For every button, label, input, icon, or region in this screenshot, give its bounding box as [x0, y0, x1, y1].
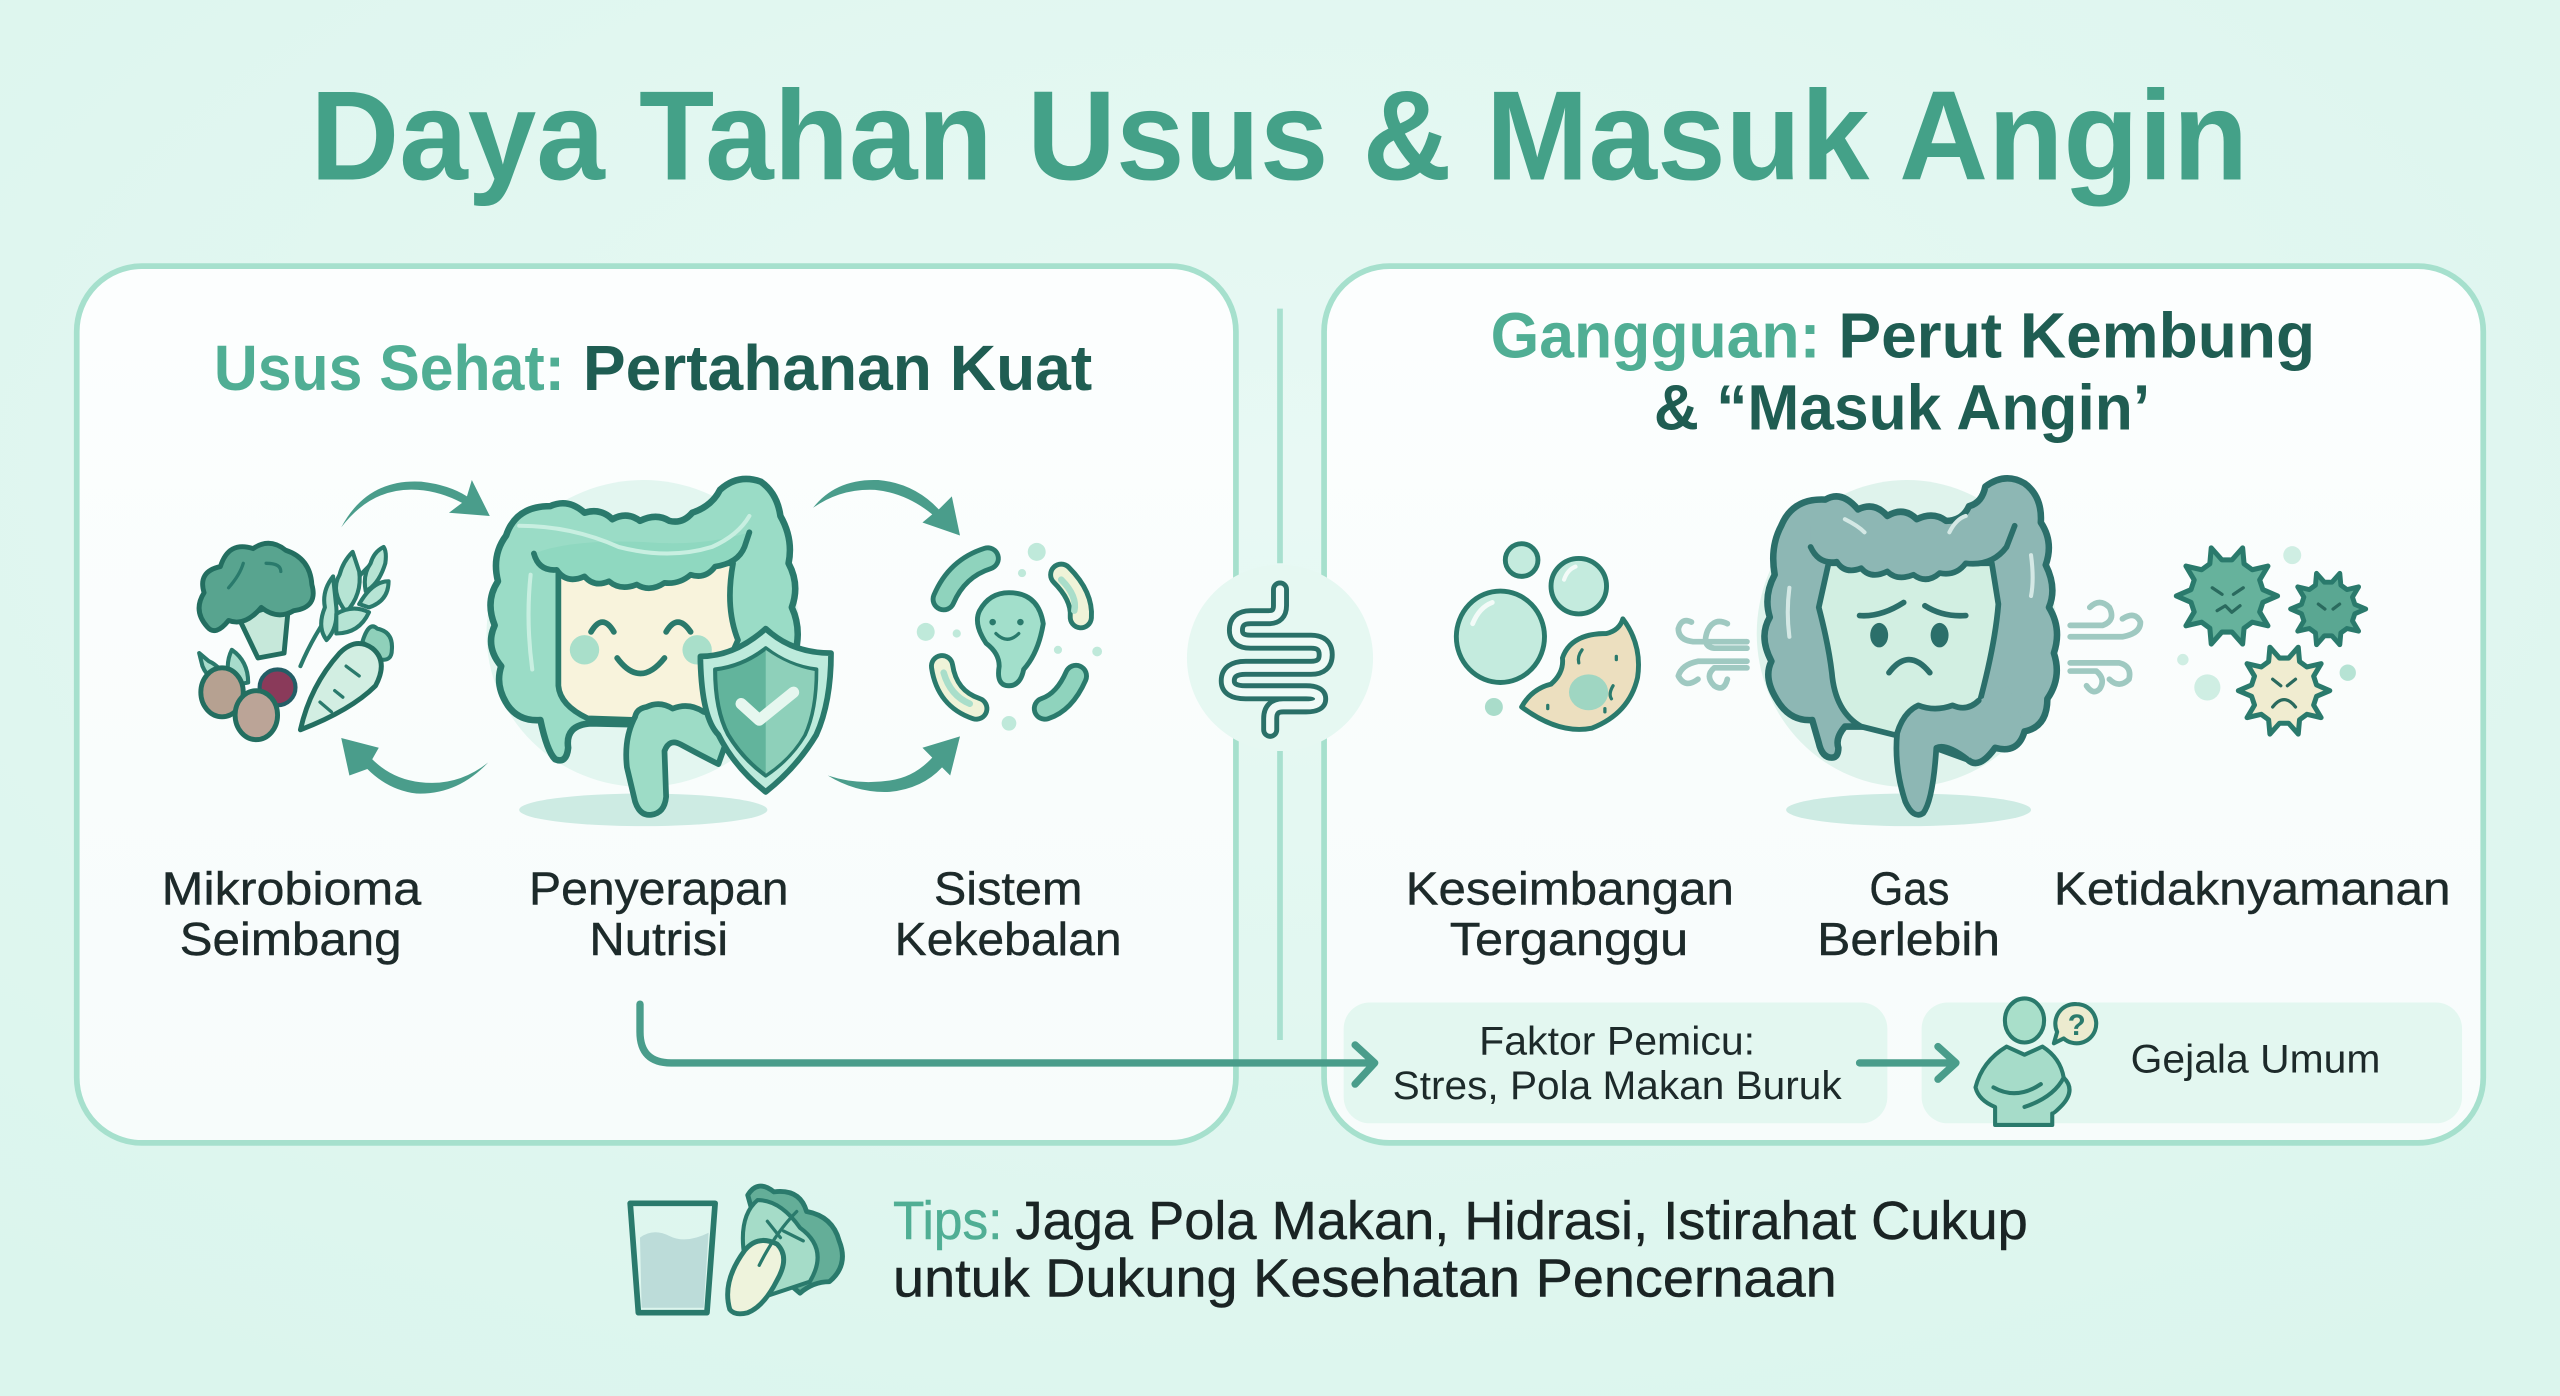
label: Penyerapan Nutrisi: Penyerapan	[529, 863, 789, 915]
tips text: Tips:	[893, 1191, 1002, 1251]
box: trigger factors: Stres, Pola Makan Buruk	[1393, 1064, 1843, 1108]
arrow: immune to gut bottom	[828, 736, 960, 792]
label: Mikrobioma Seimbang: Mikrobioma	[162, 863, 421, 915]
icon: gas bubbles and stomach	[1456, 544, 1639, 729]
face: sad	[1860, 602, 1966, 673]
face: happy	[570, 622, 712, 674]
label: Keseimbangan Terganggu: Keseimbangan	[1406, 863, 1734, 915]
icon: leafy green	[728, 1186, 842, 1314]
heading: disrupted gut: & “Masuk Angin’	[1654, 372, 2150, 443]
arrow: triggers to symptoms	[1860, 1047, 1956, 1079]
heading: disrupted gut	[1491, 301, 2315, 443]
tips text: untuk Dukung Kesehatan Pencernaan	[893, 1248, 1837, 1308]
icon: broccoli	[199, 543, 313, 658]
label: Penyerapan Nutrisi: Nutrisi	[589, 913, 728, 965]
central gut badge	[1187, 565, 1373, 751]
label: Penyerapan Nutrisi	[529, 863, 789, 965]
label: Mikrobioma Seimbang: Seimbang	[180, 913, 402, 965]
icon: intestine	[1228, 589, 1326, 730]
arrow: gut to food	[341, 738, 488, 794]
icon: herb sprig	[300, 547, 389, 666]
arrow: food to gut	[341, 480, 490, 527]
heading: disrupted gut: Gangguan:	[1491, 301, 1820, 372]
label: Sistem Kekebalan: Sistem	[934, 863, 1082, 915]
tips text: Jaga Pola Makan, Hidrasi, Istirahat Cukup	[1016, 1191, 2028, 1251]
icon: shield	[700, 629, 831, 792]
divider line	[1278, 309, 1282, 1040]
box: common symptoms: Gejala Umum	[2131, 1038, 2380, 1082]
box: trigger factors	[1344, 1002, 1887, 1123]
panel: disrupted gut	[1324, 266, 2483, 1143]
icon: carrot	[300, 626, 392, 730]
icon: glass of water	[630, 1203, 715, 1313]
label: Sistem Kekebalan	[895, 863, 1122, 965]
label: Gas Berlebih	[1817, 863, 2000, 965]
icon: person with stomach ache	[1976, 998, 2096, 1125]
panel: healthy gut	[77, 266, 1236, 1143]
icon: happy colon with shield	[487, 479, 831, 826]
label: Ketidaknyamanan: Ketidaknyamanan	[2054, 863, 2451, 915]
heading: healthy gut: Pertahanan Kuat	[583, 333, 1092, 404]
heading: healthy gut: Usus Sehat:	[214, 333, 565, 404]
label: Keseimbangan Terganggu: Terganggu	[1450, 913, 1688, 965]
box: trigger factors: Faktor Pemicu:	[1479, 1020, 1755, 1064]
icon: food group	[199, 543, 392, 740]
icon: wind right	[2070, 602, 2140, 692]
arrow: gut to immune top	[813, 480, 960, 536]
icon: wind left	[1678, 621, 1747, 688]
icon: sad colon	[1757, 478, 2057, 826]
heading: disrupted gut: Perut Kembung	[1838, 301, 2315, 372]
label: Mikrobioma Seimbang	[162, 863, 421, 965]
icon: person with stomach ache: ?	[2068, 1009, 2086, 1042]
label: Gas Berlebih: Gas	[1869, 863, 1949, 915]
icon: berries	[199, 650, 296, 740]
title: Daya Tahan Usus & Masuk Angin	[310, 65, 2248, 207]
label: Keseimbangan Terganggu	[1406, 863, 1734, 965]
tips text	[893, 1191, 2028, 1308]
label: Gas Berlebih: Berlebih	[1817, 913, 2000, 965]
arrow: gut to trigger factors	[640, 1004, 1375, 1084]
label: Sistem Kekebalan: Kekebalan	[895, 913, 1122, 965]
heading: healthy gut	[214, 333, 1092, 404]
icon: probiotic bacteria	[917, 543, 1102, 731]
icon: germs	[2176, 546, 2366, 734]
box: common symptoms	[1922, 1002, 2462, 1123]
